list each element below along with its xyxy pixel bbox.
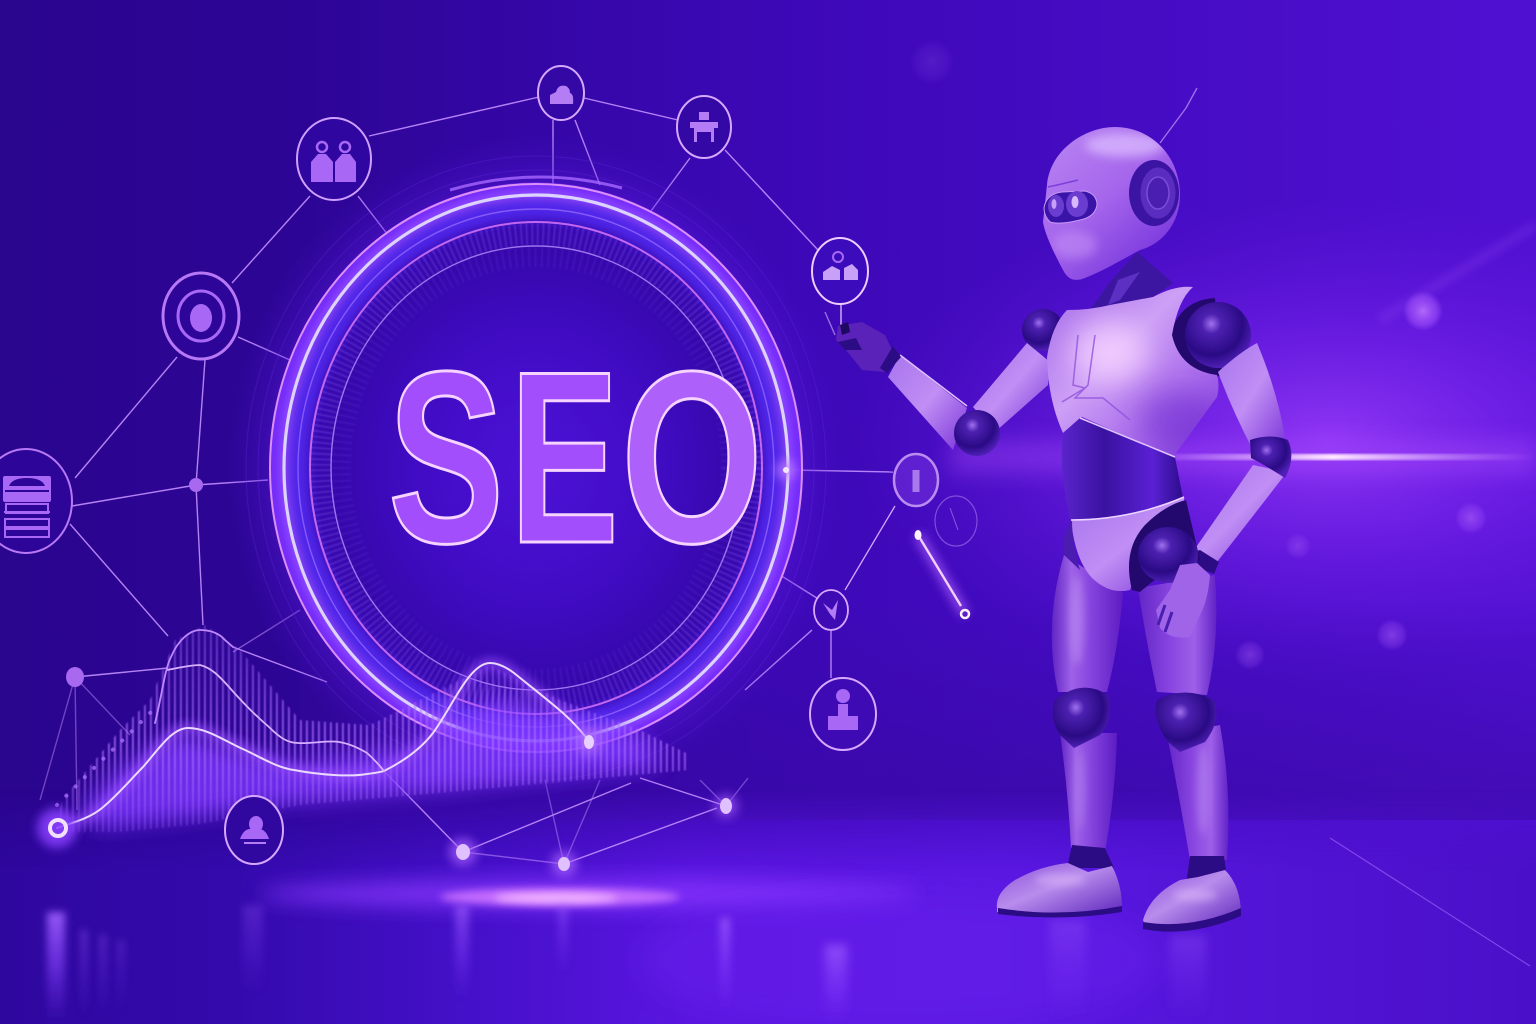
robot (836, 88, 1291, 932)
robot torso (1047, 287, 1220, 528)
small network nodes (37, 460, 796, 877)
icon node: person on stand (810, 678, 876, 750)
icon node: faded ring right (894, 454, 977, 546)
icon node: server stack (0, 449, 72, 553)
robot pelvis (1063, 497, 1200, 592)
letter E: E (510, 322, 619, 595)
bokeh lights (910, 40, 1536, 670)
letter S: S (388, 322, 504, 595)
SEO heading (388, 320, 763, 595)
robot right arm (1170, 298, 1291, 574)
icon node: users near hand (812, 238, 868, 304)
robot neck (1090, 252, 1173, 312)
line chart curves (57, 630, 588, 828)
icon node: top (538, 66, 584, 120)
icon node: people (297, 118, 371, 200)
robot antenna (1160, 88, 1197, 143)
robot ankles (1067, 845, 1228, 885)
robot left arm (836, 309, 1064, 456)
robot shoes (997, 863, 1241, 932)
robot hand on thigh (1156, 563, 1210, 638)
icon node: user bottom (225, 796, 283, 864)
waveform dots (57, 712, 151, 805)
icon node: desk (677, 96, 731, 158)
SEO ring: circular gauge (246, 156, 826, 780)
waveform bars (55, 625, 690, 832)
robot knees (1053, 688, 1217, 752)
lens flare (950, 440, 1536, 474)
letter O: O (621, 320, 763, 594)
robot head (1043, 127, 1180, 280)
network connector lines (40, 97, 893, 864)
robot front leg thigh and shin (1052, 555, 1123, 852)
SEO ring: outer glow (226, 133, 846, 803)
waveform glow (80, 700, 660, 828)
floor glow and reflections (47, 838, 1530, 1024)
icon node: target (163, 273, 239, 359)
glowing line segments on right (845, 506, 969, 618)
robot back leg thigh and shin (1138, 575, 1228, 860)
icon node: small figure (814, 590, 848, 630)
